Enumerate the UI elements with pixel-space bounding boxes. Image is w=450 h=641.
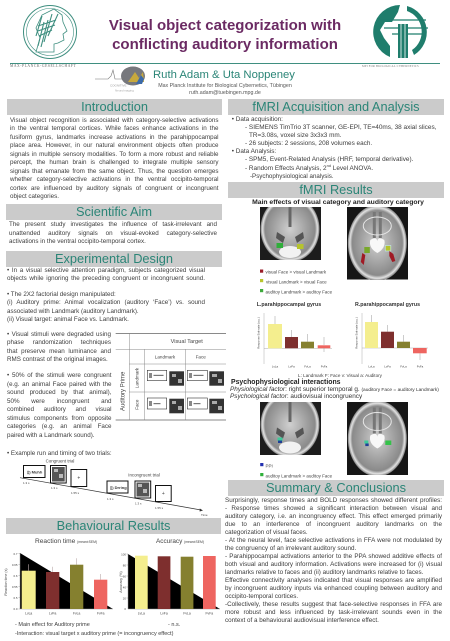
chart: accuracy: 40 (123, 586, 126, 590)
title: Visual object categorization with (109, 17, 341, 34)
affiliation (158, 83, 292, 96)
chart key: L: Landmark F: Face v: Visual a: Auditory (298, 373, 382, 378)
timeline: two trials: Congruent trial (46, 458, 74, 463)
text: congruency (7, 372, 112, 438)
chart: left parahippocampal response: Response Estimate (a.u.) (256, 317, 260, 349)
timeline: two trials: 1.3 s (51, 486, 58, 490)
heading: Behavioural Results (6, 518, 221, 534)
text: behavioural note, reaction time: - Main effect for Auditory prime (15, 622, 90, 628)
heading: Scientific Aim: Scientific Aim (76, 204, 152, 219)
heading: fMRI Results: fMRI Results (299, 182, 373, 197)
text: summary: context of a behavioural audiovisual interference effect. (225, 617, 379, 624)
text: introduction: Visual object recognition is associated with category-selective activations (10, 117, 218, 124)
text: fMRI acquisition: - Random Effects Analysis, 2nd Level ANOVA. (245, 163, 373, 172)
text: introduction: signals that emanate from the same object. Thus, the question emerges (10, 168, 218, 175)
text: introduction: percept, the human brain is challenged to integrate multiple sensory (10, 159, 218, 166)
timeline: two trials: Incongruent trial (128, 473, 160, 478)
chart: reaction time: 0.65 (12, 563, 18, 567)
text: fMRI acquisition: -Psychophysiological analysis. (250, 173, 334, 180)
chart: reaction time: 0.5 (13, 596, 18, 600)
chart: accuracy: 0 (124, 607, 126, 611)
logo: Cognitive Neuroimaging: NeuroImaging (115, 88, 134, 92)
text: physiological factor: Physiological factor: right superior temporal g. (auditory Face = auditory Landmark) (230, 386, 439, 393)
text: fMRI acquisition: TR=3.08s, voxel size 3x3x3 mm. (249, 132, 342, 139)
text: congruency: categories (e.g. an animal Face (7, 423, 112, 430)
text: congruency: paired with a Landmark sound). (7, 432, 95, 438)
text: scientific aim: The present study investigates the influence of task-irrelevant and (9, 221, 217, 228)
chart: right parahippocampal response: FvFa (417, 364, 424, 368)
legend: PPI: PPI (266, 464, 273, 469)
text: introduction: whether category-selective activations in the ventral occipito-temporal (10, 176, 218, 183)
table: visual target by auditory prime: Auditory Prime (120, 371, 126, 411)
timeline: two trials: 1.3 s (135, 502, 142, 506)
chart: reaction time (4, 538, 113, 616)
chart: accuracy: Accuracy (%) (119, 571, 123, 593)
text: introduction (10, 117, 218, 200)
text: fMRI acquisition: - SPM5, Event-Related Analysis (HRF, temporal derivative). (245, 156, 413, 163)
chart: reaction time: 0.55 (12, 585, 18, 589)
text: summary: - At the neural level, face selective activations in FFA were not modulated by (225, 537, 442, 544)
timeline: two trials: 1.55 s (155, 506, 164, 510)
text: congruency: (e.g. an animal Face paired with the (7, 380, 112, 388)
chart: reaction time: LvFa (49, 612, 57, 616)
chart: reaction time: FvLa (73, 612, 81, 616)
text: visual stimuli: RMS contrast of the original images. (7, 356, 108, 363)
affiliation: ruth.adam@tuebingen.mpg.de (189, 90, 261, 96)
text: experimental design intro: (ii) Visual target: animal Face vs. Landmark. (7, 316, 129, 323)
title (109, 17, 341, 53)
text: psychological factor: Psychological factor: audiovisual incongruency (230, 393, 362, 400)
brain: axial PPI (347, 402, 408, 475)
label: right parahippocampal gyrus: R.parahippocampal gyrus (355, 302, 420, 308)
text: introduction: object categories. (10, 193, 59, 200)
text: congruency: stimulus components from opposite (7, 414, 112, 422)
institute name: MPI FOR BIOLOGICAL CYBERNETICS (362, 64, 419, 68)
table: visual target by auditory prime: Face (134, 399, 139, 410)
timeline: two trials: 1.3 s (23, 481, 30, 485)
text: visual stimuli: • Visual stimuli were degraded using (7, 331, 111, 338)
text: summary: by incongruent auditory inputs via enhanced coupling between auditory and (225, 585, 442, 592)
text: summary: more robust and less influenced by task-irrelevant sounds even in the (225, 609, 442, 616)
heading: Introduction: Introduction (81, 99, 148, 114)
chart: left parahippocampal response: LvLa (272, 364, 279, 368)
text: summary: categorization of visual faces. (225, 529, 308, 536)
table: visual target by auditory prime: Landmark (134, 367, 139, 388)
text: summary: landmarks relative to faces and (ii) auditory landmarks relative to faces. (225, 569, 423, 576)
heading: Behavioural Results: Behavioural Results (57, 518, 170, 533)
text: congruency: • 50% of the stimuli were congruent (7, 372, 112, 379)
text: visual stimuli: phase randomization techniques (7, 339, 111, 346)
chart: accuracy: FvFa (206, 612, 213, 616)
text: introduction: in the ventral temporal cortices. While faces enhance activations in the (10, 125, 218, 132)
timeline: two trials: + (162, 491, 165, 497)
heading: Experimental Design (6, 251, 222, 267)
text: summary: Effective connectivity analyses indicated that visual responses are amplified (225, 577, 442, 584)
heading: fMRI Acquisition and Analysis: fMRI Acquisition and Analysis (252, 99, 420, 114)
affiliation: Max Planck Institute for Biological Cybernetics, Tübingen (158, 83, 292, 89)
text: experimental design intro: (i) Auditory prime: Animal vocalization (auditory ‘Face’) vs. sound (7, 299, 205, 306)
logo: Cognitive Neuroimaging: COGNITIVE (110, 84, 127, 88)
chart: accuracy: LvFa (160, 612, 168, 616)
text: summary (225, 497, 442, 624)
heading: Summary & Conclusions (228, 480, 444, 496)
chart: right parahippocampal response: FvLa (400, 364, 407, 368)
timeline: two trials: 1.3 s (107, 497, 114, 501)
chart: accuracy: FvLa (183, 612, 191, 616)
chart: reaction time: FvFa (97, 612, 105, 616)
text: summary: - Parahippocampal activations anterior to the PPA showed additive effects of (225, 553, 442, 560)
brain: axial main effects (347, 207, 408, 280)
heading: Summary & Conclusions: Summary & Conclusions (266, 480, 406, 495)
text: scientific aim (9, 221, 217, 245)
text: experimental design intro: • The 2X2 factorial design manipulated: (7, 291, 116, 298)
authors: Ruth Adam & Uta Noppeney (153, 69, 295, 81)
text: fMRI acquisition: - SIEMENS TimTrio 3T scanner, GE-EPI, TE=40ms, 38 axial slices, (245, 124, 436, 131)
brain: coronal main effects (260, 207, 321, 260)
text: fMRI acquisition (232, 116, 436, 180)
timeline: two trials: ▯) Drring (110, 485, 127, 490)
text: summary: -Collectively, these results suggest that face-selective responses in FFA are (225, 601, 442, 608)
legend: main effects: visual Face > visual Landmark (266, 270, 327, 275)
chart: left parahippocampal response: FvLa (304, 364, 311, 368)
text: scientific aim: activations in the ventral occipito-temporal cortex. (9, 238, 146, 245)
legend: main effects: auditoy Landmark > auditoy Face (266, 290, 333, 295)
chart: left parahippocampal response: FvFa (321, 364, 328, 368)
logo: MPI for Biological Cybernetics (373, 5, 428, 58)
timeline: two trials: ▯) Muhh (27, 470, 43, 475)
legend: main effects: visual Landmark > visual Face (266, 280, 327, 284)
society name: MAX-PLANCK-GESELLSCHAFT (10, 64, 76, 68)
logo: Max Planck Society Minerva (23, 5, 77, 59)
heading: fMRI Results (228, 182, 444, 198)
text: summary: both visual and auditory information. Activations were increased for (i) visual (225, 561, 442, 568)
chart: accuracy (119, 538, 220, 616)
text: introduction: cortex are influenced by auditory signals of congruent or incongruent (10, 185, 218, 192)
timeline: two trials (20, 458, 208, 517)
chart: right parahippocampal response: LvLa (368, 364, 375, 368)
text: visual stimuli: that preserve mean luminance and (7, 348, 111, 355)
text: summary: due to an interference of incongruent auditory landmarks on the (225, 521, 442, 528)
title: conflicting auditory information (112, 36, 338, 53)
text: summary: the congruency of an irrelevant auditory sound. (225, 545, 356, 552)
chart: reaction time: Reaction time (mean±SEM) (35, 538, 97, 545)
chart: accuracy: 100 (121, 552, 126, 556)
heading: Introduction (7, 99, 222, 115)
chart: accuracy: 80 (123, 564, 126, 568)
chart: accuracy: 20 (123, 596, 126, 600)
chart: left parahippocampal response: LvFa (288, 364, 295, 368)
text: behavioural interaction: -Interaction: visual target x auditory prime (= incongruency effect) (15, 631, 173, 637)
chart: reaction time: 0.0 (13, 607, 18, 611)
text: introduction: place area. However, in our natural environment objects often produce (10, 142, 218, 149)
chart: right parahippocampal response (354, 313, 428, 368)
text: summary: Surprisingly, response times and BOLD responses showed different profiles: (225, 497, 442, 504)
legend: PPI (260, 463, 333, 479)
chart: accuracy: 60 (123, 574, 126, 578)
text: fMRI acquisition: • Data Analysis: (232, 148, 276, 155)
chart: reaction time: 0.7 (13, 552, 18, 556)
text: congruency: combined auditory and visual (7, 406, 112, 413)
chart: left parahippocampal response (256, 313, 332, 368)
text: example run: • Example run and timing of two trials: (7, 450, 112, 457)
table: visual target by auditory prime: Landmark (155, 354, 176, 359)
chart: right parahippocampal response: Response Estimate (a.u.) (354, 317, 358, 349)
text: summary: auditory category, i.e. an incongruency effect. This effect emerged primarily (225, 513, 442, 520)
text: summary: - Response times showed a significant interaction between visual and (225, 505, 442, 512)
chart: reaction time: 0.6 (13, 574, 18, 578)
chart: accuracy: LvLa (138, 612, 145, 616)
text: introduction: signals in multiple sensory modalities. To form a more robust and reliable (10, 151, 218, 158)
table: visual target by auditory prime (116, 333, 226, 420)
timeline: two trials: + (77, 476, 80, 482)
text: scientific aim: unattended auditory signals on visual-evoked category-selective (9, 230, 217, 236)
chart: reaction time: LvLa (25, 612, 32, 616)
text: congruency: sound produced by that animal), (7, 389, 112, 396)
chart: accuracy: Accuracy (mean±SEM) (156, 538, 204, 545)
text: summary: occipito-temporal cortices. (225, 593, 298, 600)
subheading: psychophysiological interactions: Psychophysiological interactions (231, 379, 341, 386)
timeline: two trials: Time (201, 513, 208, 517)
text: experimental design intro (7, 267, 205, 323)
legend: PPI: auditoy Landmark > auditoy Face (266, 474, 333, 479)
header rule (10, 63, 440, 64)
table: visual target by auditory prime: Face (196, 354, 206, 359)
heading: Experimental Design: Experimental Design (55, 251, 173, 266)
chart: reaction time: Reaction time (s) (4, 568, 8, 596)
text: congruency: 50% were incongruent and (7, 398, 112, 404)
text: fMRI acquisition: • Data acquisition: (232, 116, 283, 123)
legend: main effects (260, 270, 333, 295)
text: behavioural note, accuracy: - n.s. (168, 622, 180, 628)
text: fMRI acquisition: - 26 subjects: 2 sessions, 208 volumes each. (245, 140, 372, 147)
text: introduction: fusiform gyrus, landmarks increase activations in the parahippocampal (10, 134, 218, 141)
chart: right parahippocampal response: LvFa (384, 364, 391, 368)
text: experimental design intro: associated with Landmark (auditory Landmark). (7, 308, 139, 315)
text: experimental design intro: • In a visual selective attention paradigm, subjects categorized visual (7, 267, 205, 274)
logo: Cognitive Neuroimaging (95, 66, 145, 92)
table: visual target by auditory prime: Visual Target (171, 339, 203, 345)
timeline: two trials: 1.55 s (71, 491, 80, 495)
label: left parahippocampal gyrus: L.parahippocampal gyrus (257, 302, 321, 308)
text: experimental design intro: objects while ignoring the preceding congruent or incongruent sound. (7, 275, 205, 282)
subheading: main effects: Main effects of visual category and auditory category (252, 199, 424, 206)
heading: Scientific Aim (6, 204, 222, 220)
text: visual stimuli (7, 331, 111, 363)
brain: coronal PPI (260, 402, 321, 455)
